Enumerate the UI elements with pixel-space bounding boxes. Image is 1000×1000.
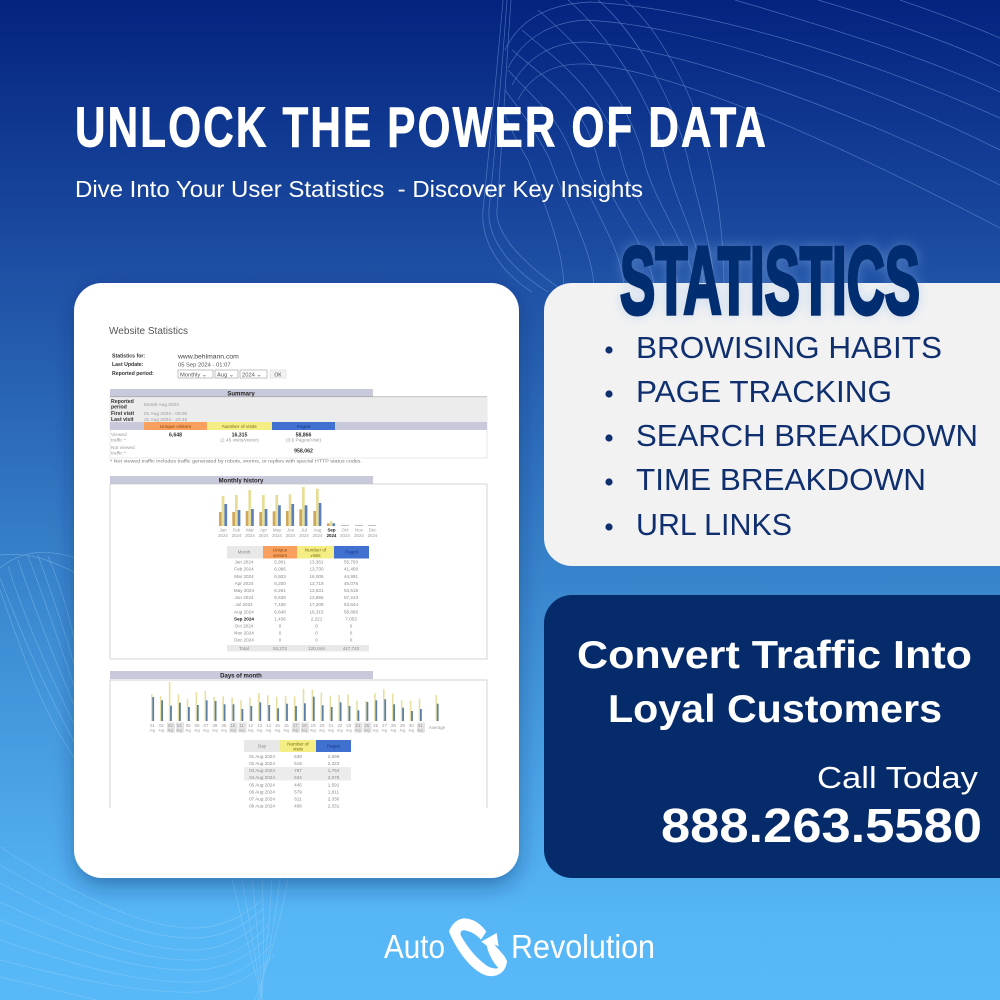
bullet list — [605, 330, 978, 542]
monthly data table: Aug 2024 — [234, 609, 254, 614]
report metadata: OK — [274, 372, 282, 378]
monthly data table: 53,618 — [344, 588, 358, 593]
daily bar chart: Aug — [346, 728, 352, 732]
monthly data table: 44,991 — [344, 574, 358, 579]
monthly data table: 6,086 — [274, 567, 286, 572]
monthly data table: 5,961 — [274, 560, 286, 564]
monthly data table: 7,436 — [274, 602, 286, 607]
monthly bar chart: 2024 — [286, 533, 296, 538]
monthly data table: Jun 2024 — [235, 595, 254, 600]
report metadata: 05 Sep 2024 - 01:07 — [178, 362, 231, 368]
daily bar chart: Aug — [203, 728, 209, 732]
summary table — [110, 389, 487, 464]
monthly bar chart: Feb — [233, 528, 241, 532]
monthly bar chart: 2024 — [299, 533, 309, 538]
summary table: (2.45 visits/visitor) — [220, 438, 259, 444]
days of month heading — [110, 671, 373, 680]
call to action heading: Loyal Customers — [608, 688, 942, 731]
daily bar chart: 06 — [195, 723, 200, 728]
bullet list: PAGE TRACKING — [636, 374, 892, 409]
daily bar chart: 12 — [248, 723, 254, 728]
daily bar chart: 31 — [418, 723, 423, 728]
monthly data table: 0 — [279, 631, 282, 636]
daily bar chart — [150, 682, 446, 732]
daily bar chart: 21 — [329, 723, 334, 728]
monthly bar chart: Mar — [246, 528, 254, 532]
monthly data table: 57,243 — [344, 595, 358, 600]
daily bar chart: 08 — [212, 723, 218, 728]
summary table: 6,648 — [169, 432, 182, 438]
daily data table: 1,764 — [328, 768, 340, 773]
summary table: 31 Aug 2024 - 23:45 — [144, 417, 188, 423]
daily bar chart: 13 — [257, 723, 263, 728]
daily bar chart: Aug — [239, 728, 245, 732]
monthly data table: 6,261 — [274, 588, 286, 593]
monthly history heading — [110, 476, 373, 484]
panel: statistics topics — [544, 283, 1000, 566]
bullet list: SEARCH BREAKDOWN — [636, 418, 978, 453]
monthly data table: Unique — [273, 548, 288, 552]
daily bar chart: Aug — [150, 728, 156, 732]
screenshot heading: Website Statistics — [109, 326, 188, 337]
monthly data table: 0 — [350, 631, 353, 636]
daily bar chart: Aug — [292, 728, 298, 732]
daily bar chart: Aug — [248, 728, 254, 732]
report metadata: Reported period: — [112, 371, 154, 377]
monthly data table: 45,076 — [344, 581, 358, 586]
daily bar chart: Aug — [408, 728, 414, 732]
daily bar chart: 07 — [204, 723, 209, 728]
panel: website statistics screenshot — [74, 283, 519, 878]
daily bar chart: Aug — [391, 728, 396, 732]
logo: Auto Revolution: Revolution — [511, 928, 655, 965]
report metadata: Statistics for: — [112, 354, 145, 360]
summary table: 958,062 — [294, 448, 313, 454]
monthly data table: Apr 2024 — [235, 581, 254, 586]
daily bar chart: 05 — [186, 723, 191, 728]
summary table: Number of visits — [222, 424, 257, 430]
phone number: 888.263.5580 — [661, 800, 982, 853]
daily bar chart: Aug — [355, 728, 361, 732]
summary table: Last visit — [111, 417, 134, 423]
daily bar chart: Aug — [283, 728, 289, 732]
summary table: period — [111, 404, 127, 410]
daily bar chart: 04 — [177, 723, 182, 728]
daily bar chart: 14 — [266, 723, 271, 728]
daily data table: 1,811 — [328, 790, 340, 794]
report metadata: Monthly ⌄ — [180, 372, 207, 378]
monthly bar chart: 2024 — [259, 533, 269, 538]
monthly bar chart: Jun — [287, 528, 295, 532]
monthly data table: 6,639 — [274, 595, 286, 600]
daily data table: 519 — [294, 761, 302, 766]
monthly data table: 0 — [350, 624, 353, 628]
daily bar chart: 02 — [159, 723, 164, 728]
daily bar chart: Aug — [417, 728, 423, 732]
monthly history heading: Monthly history — [219, 478, 264, 484]
summary table: Unique visitors — [160, 424, 192, 430]
monthly data table: 417,742 — [343, 646, 360, 651]
monthly bar chart: Sep — [327, 528, 336, 532]
daily bar chart: Aug — [319, 728, 325, 732]
monthly bar chart: Oct — [342, 528, 349, 532]
monthly bar chart: 2024 — [218, 533, 228, 538]
daily data table: 445 — [294, 782, 302, 788]
monthly data table: 13,631 — [309, 588, 324, 593]
daily bar chart: 18 — [302, 723, 307, 728]
daily data table: 08 Aug 2024 — [249, 804, 275, 808]
report metadata — [112, 354, 286, 378]
monthly data table: 0 — [315, 638, 318, 643]
monthly data table: 58,866 — [344, 609, 358, 614]
summary table: Pages — [297, 424, 311, 430]
daily data table: 2,075 — [328, 775, 340, 780]
monthly bar chart: 2024 — [245, 533, 255, 538]
daily bar chart: Aug — [185, 728, 191, 732]
daily data table: 06 Aug 2024 — [249, 790, 275, 794]
daily bar chart: Aug — [275, 728, 280, 732]
daily data table: Pages — [327, 744, 341, 748]
monthly bar chart: 2024 — [340, 533, 350, 538]
monthly data table: 1,436 — [274, 616, 286, 621]
daily bar chart: 25 — [364, 723, 370, 728]
daily bar chart: Aug — [328, 728, 334, 732]
daily data table: 03 Aug 2024 — [249, 768, 275, 773]
monthly data table: Total — [239, 646, 249, 651]
monthly data table: 13,718 — [309, 581, 324, 586]
daily data table: 2,330 — [328, 796, 340, 802]
daily data table: 2,699 — [328, 754, 340, 759]
daily data table: 02 Aug 2024 — [249, 761, 275, 766]
daily data table: Day — [258, 744, 267, 748]
daily bar chart: Aug — [310, 728, 316, 732]
monthly data table: Oct 2024 — [235, 624, 254, 628]
daily data table: 498 — [294, 804, 302, 808]
title: UNLOCK THE POWER OF DATA — [75, 96, 768, 160]
daily bar chart: 26 — [373, 723, 379, 728]
logo: Auto Revolution — [384, 918, 655, 976]
call today label: Call Today — [817, 760, 979, 795]
monthly bar chart: 2024 — [368, 533, 378, 538]
monthly data table: Mar 2024 — [234, 574, 254, 579]
call to action heading — [577, 634, 972, 731]
monthly bar chart: 2024 — [272, 533, 282, 538]
report metadata: www.behlmann.com — [177, 354, 239, 360]
monthly bar chart: Nov — [355, 528, 364, 532]
monthly data table: 0 — [279, 638, 282, 643]
daily data table: 01 Aug 2024 — [249, 754, 275, 759]
monthly data table: 17,208 — [309, 602, 324, 607]
monthly data table: 2,221 — [311, 616, 323, 621]
background line pattern: top right — [483, 0, 1000, 292]
summary table: First visit — [111, 411, 134, 417]
monthly data table: visits — [310, 553, 321, 558]
daily bar chart: Aug — [176, 728, 182, 732]
daily data table: 611 — [294, 796, 302, 802]
monthly data table: 120,044 — [308, 646, 325, 651]
monthly data table: 55,793 — [344, 560, 358, 564]
monthly data table: 13,865 — [309, 595, 324, 600]
monthly data table: visitors — [273, 553, 288, 558]
daily data table: 579 — [294, 790, 302, 794]
monthly data table: 6,200 — [274, 581, 286, 586]
monthly data table: Nov 2024 — [234, 631, 254, 636]
monthly data table: Jul 2024 — [235, 602, 253, 607]
report metadata: Aug ⌄ — [217, 372, 234, 378]
monthly data table: Sep 2024 — [234, 616, 254, 621]
daily bar chart: 11 — [239, 723, 245, 728]
daily bar chart: 29 — [400, 723, 405, 728]
monthly data table: 13,730 — [309, 567, 324, 572]
daily bar chart: Aug — [159, 728, 164, 732]
daily data table: 04 Aug 2024 — [249, 775, 275, 780]
call to action heading: Convert Traffic Into — [577, 634, 972, 677]
report metadata: Last Update: — [112, 362, 144, 368]
monthly bar chart: May — [273, 528, 282, 532]
daily bar chart: Aug — [230, 728, 236, 732]
monthly data table: Feb 2024 — [234, 567, 254, 572]
daily bar chart: Aug — [373, 728, 379, 732]
icon: revolution ring with arrow — [449, 918, 507, 976]
daily bar chart: 09 — [221, 723, 227, 728]
summary table: Not viewed — [111, 445, 135, 451]
daily bar chart: Aug — [364, 728, 370, 732]
panel: call to action — [544, 595, 1000, 878]
summary table: 58,866 — [296, 432, 312, 438]
summary table: traffic * — [111, 438, 126, 444]
days of month frame — [110, 680, 487, 820]
monthly bar chart — [218, 487, 378, 538]
daily bar chart: Aug — [221, 728, 227, 732]
monthly bar chart: 2024 — [313, 533, 323, 538]
monthly bar chart: Jan — [219, 528, 227, 532]
daily bar chart: Aug — [301, 728, 307, 732]
daily data table: 534 — [294, 775, 302, 780]
daily bar chart: Aug — [266, 728, 272, 732]
monthly bar chart: 2024 — [354, 533, 364, 538]
logo: Auto Revolution: Auto — [384, 928, 445, 965]
monthly data table — [227, 546, 369, 652]
daily data table: 05 Aug 2024 — [249, 782, 275, 788]
monthly data table: 16,315 — [309, 609, 324, 614]
daily data table: 07 Aug 2024 — [249, 796, 275, 802]
daily bar chart: Aug — [382, 728, 388, 732]
summary table: Reported — [111, 399, 134, 405]
monthly data table: Dec 2024 — [234, 638, 254, 643]
daily bar chart: 28 — [391, 723, 396, 728]
subtitle: Dive Into Your User Statistics - Discover Key Insights — [75, 176, 643, 202]
summary table: 01 Aug 2024 - 00:00 — [144, 411, 188, 417]
daily data table — [244, 740, 351, 808]
monthly data table: 53,644 — [344, 602, 358, 607]
daily bar chart: Average — [429, 725, 446, 730]
monthly data table: 13,361 — [309, 560, 324, 564]
summary table: (3.6 Pages/Visit) — [286, 438, 321, 444]
daily bar chart: Aug — [257, 728, 263, 732]
bullet list: URL LINKS — [636, 507, 792, 542]
monthly data table: 16,005 — [309, 574, 324, 579]
days of month heading: Days of month — [220, 674, 262, 680]
bullet list: TIME BREAKDOWN — [636, 462, 926, 497]
daily bar chart: 24 — [355, 723, 361, 728]
monthly data table: Jan 2024 — [235, 560, 254, 564]
daily bar chart: 27 — [382, 723, 387, 728]
daily data table: visits — [293, 746, 304, 752]
summary table: 16,315 — [232, 432, 248, 438]
daily data table: 2,323 — [328, 761, 340, 766]
daily bar chart: 20 — [320, 723, 325, 728]
daily bar chart: Aug — [212, 728, 218, 732]
monthly bar chart: Dec — [369, 528, 377, 532]
daily bar chart: Aug — [337, 728, 343, 732]
background line pattern: bottom left — [0, 552, 288, 1000]
monthly bar chart: Jul — [301, 528, 307, 532]
daily bar chart: 30 — [409, 723, 414, 728]
daily data table: 539 — [294, 754, 302, 759]
monthly data table: 0 — [350, 638, 353, 643]
monthly bar chart: Apr — [260, 528, 267, 532]
monthly bar chart: 2024 — [232, 533, 242, 538]
summary table: Month Aug 2024 — [144, 402, 179, 408]
summary table: Summary — [227, 392, 255, 398]
daily data table: 787 — [294, 768, 302, 773]
monthly bar chart: 2024 — [327, 533, 337, 538]
monthly data table: Number of — [305, 548, 327, 552]
daily bar chart: 15 — [275, 723, 280, 728]
daily bar chart: 16 — [284, 723, 289, 728]
monthly data table: 53,272 — [273, 646, 287, 651]
monthly data table: 7,053 — [345, 616, 357, 621]
monthly data table: 6,603 — [274, 574, 286, 579]
monthly history frame — [110, 484, 487, 659]
monthly bar chart: Aug — [314, 528, 322, 532]
daily bar chart: 22 — [337, 723, 343, 728]
daily bar chart: 23 — [346, 723, 352, 728]
daily bar chart: Aug — [194, 728, 200, 732]
daily bar chart: 03 — [168, 723, 173, 728]
daily data table: 1,591 — [328, 782, 340, 788]
report metadata: 2024 ⌄ — [242, 372, 261, 378]
monthly data table: 0 — [315, 624, 318, 628]
daily bar chart: Aug — [400, 728, 405, 732]
summary table: Viewed — [111, 432, 127, 438]
monthly data table: May 2024 — [234, 588, 255, 593]
daily data table: Number of — [287, 741, 309, 746]
monthly data table: 41,458 — [344, 567, 358, 572]
monthly data table: 0 — [279, 624, 282, 628]
daily bar chart: 19 — [311, 723, 316, 728]
daily bar chart: 17 — [293, 723, 298, 728]
summary table: traffic * — [111, 450, 126, 456]
bullet list: BROWISING HABITS — [636, 330, 942, 365]
daily bar chart: 10 — [230, 723, 236, 728]
monthly data table: Month — [238, 550, 251, 554]
monthly data table: Pages — [345, 550, 359, 554]
summary table: * Not viewed traffic includes traffic generated by robots, worms, or replies with special HTTP status codes. — [110, 458, 362, 464]
daily data table: 2,331 — [328, 804, 340, 808]
daily bar chart: Aug — [167, 728, 173, 732]
monthly data table: 0 — [315, 631, 318, 636]
daily bar chart: 01 — [150, 723, 155, 728]
monthly data table: 6,648 — [274, 609, 286, 614]
